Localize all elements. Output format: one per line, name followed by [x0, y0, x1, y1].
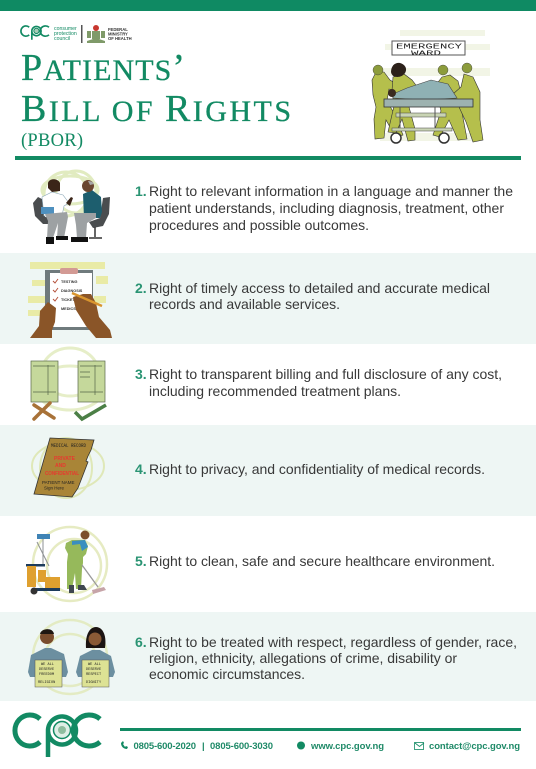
row 4 icon: medical records folder: MEDICAL RECORD: [51, 442, 87, 449]
top green bar: [0, 0, 536, 11]
subtitle: (PBOR): [21, 131, 83, 151]
row 2 text: records and available services.: [149, 296, 340, 312]
row 6 icon: two people with signs: DESERVE: [39, 668, 54, 672]
row 1 icon: doctor and patient: [33, 171, 110, 244]
row 1 text: 1.: [135, 183, 147, 199]
row 4 icon: medical records folder: AND: [55, 463, 66, 469]
footer phone: [121, 741, 273, 752]
row 1 text: procedures and possible outcomes.: [149, 217, 369, 233]
header logos: FEDERAL: [108, 27, 128, 32]
header logos: OF HEALTH: [108, 36, 132, 41]
row 5 icon: cleaner with trolley: [26, 527, 107, 601]
row 2 icon: clipboard checklist: TESTING: [61, 280, 78, 284]
row 6 text: economic circumstances.: [149, 666, 305, 682]
row 4 text: 4.: [135, 461, 147, 477]
row 4 icon: medical records folder: CONFIDENTIAL: [45, 471, 79, 477]
row 4 text: Right to privacy, and confidentiality of medical records.: [149, 461, 485, 477]
header rule: [15, 156, 521, 160]
header illustration: emergency ward stretcher: [372, 30, 490, 143]
row 3 text: Right to transparent billing and full disclosure of any cost,: [149, 366, 502, 382]
row 6 icon: two people with signs: DESERVE: [86, 668, 101, 672]
row 3 text: including recommended treatment plans.: [149, 383, 401, 399]
title: PATIENTS’: [21, 47, 185, 89]
band: row 6: [0, 612, 536, 701]
header logos: consumer: [54, 26, 77, 32]
row 2 icon: clipboard checklist: [28, 262, 112, 338]
row 2 text: 2.: [135, 280, 147, 296]
header logos: [21, 25, 132, 43]
row 2 text: Right of timely access to detailed and accurate medical: [149, 280, 490, 296]
row 2 icon: clipboard checklist: DIAGNOSIS: [61, 289, 83, 293]
row 6 icon: two people with signs: RESPECT: [86, 673, 102, 677]
row 6 icon: two people with signs: [28, 620, 115, 694]
row 4 icon: medical records folder: [32, 438, 104, 498]
row 6 icon: two people with signs: WE ALL: [88, 663, 101, 667]
row 2 icon: clipboard checklist: MEDICS: [61, 307, 76, 311]
band: row 2: [0, 253, 536, 344]
row 6 icon: two people with signs: WE ALL: [41, 663, 54, 667]
row 4 icon: medical records folder: PRIVATE: [54, 456, 76, 462]
footer CPC logo: [15, 715, 100, 757]
footer phone: 0805-600-3030: [210, 741, 273, 752]
row 3 icon: bills with cross and tick: [31, 348, 106, 419]
row 2 icon: clipboard checklist: TICKETS: [61, 298, 78, 302]
footer phone: 0805-600-2020: [134, 741, 196, 752]
row 6 text: 6.: [135, 634, 147, 650]
row 4 icon: medical records folder: Sign Here: [44, 486, 65, 490]
band: row 4: [0, 425, 536, 516]
row 4 icon: medical records folder: PATIENT NAME: [42, 480, 75, 485]
header illustration: emergency ward stretcher: WARD: [411, 50, 441, 57]
row 5 text: 5.: [135, 553, 147, 569]
row 1 text: [135, 183, 513, 233]
row 6 icon: two people with signs: RELIGION: [38, 681, 55, 685]
header illustration: emergency ward stretcher: EMERGENCY: [396, 44, 463, 52]
header logos: council: [54, 36, 70, 42]
row 3 text: [135, 366, 502, 399]
row 3 text: 3.: [135, 366, 147, 382]
header logos: protection: [54, 31, 77, 37]
row 1 text: patient understands, including diagnosis, treatment, other: [149, 200, 504, 216]
header logos: MINISTRY: [108, 32, 128, 36]
footer rule: [120, 728, 521, 731]
title: BILL OF RIGHTS: [21, 88, 291, 130]
footer phone: |: [202, 741, 205, 752]
row 2 text: [135, 280, 490, 312]
row 6 text: [135, 634, 517, 682]
row 6 text: Right to be treated with respect, regardless of gender, race,: [149, 634, 517, 650]
footer website: www.cpc.gov.ng: [310, 741, 384, 752]
title: [21, 47, 291, 130]
row 1 text: Right to relevant information in a language and manner the: [149, 183, 513, 199]
row 6 icon: two people with signs: FREEDOM: [39, 673, 54, 677]
row 6 text: religion, ethnicity, allegations of crime, disability or: [149, 650, 457, 666]
row 5 text: Right to clean, safe and secure healthcare environment.: [149, 553, 495, 569]
row 6 icon: two people with signs: DIGNITY: [86, 681, 102, 685]
footer email: contact@cpc.gov.ng: [429, 741, 520, 752]
